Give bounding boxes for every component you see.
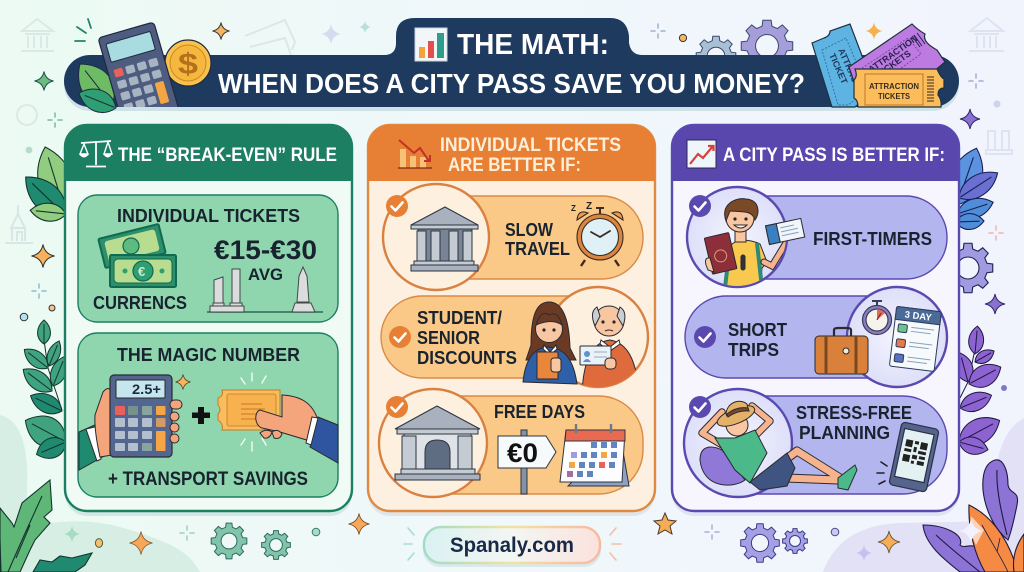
foliage: bottom left big leaves: [0, 480, 92, 572]
row label line 2: SENIOR: [417, 328, 480, 348]
panel: individual tickets are better if: [368, 125, 655, 516]
check badge: [694, 326, 716, 348]
icon: zero price sign: [498, 430, 556, 494]
icon: zero price sign: €0: [507, 438, 538, 468]
icon: alarm clock: Z: [571, 204, 576, 213]
badge pill: [424, 527, 600, 563]
title banner: [64, 18, 959, 111]
icon: museum: [395, 406, 480, 480]
logo badge: Spanaly.com: [423, 527, 601, 567]
icon: 3 day planner: 3 DAY: [904, 309, 933, 324]
ghost icon: church: [5, 205, 33, 243]
row: free days: [379, 389, 643, 497]
card: individual tickets: [78, 195, 338, 322]
panel header band: [66, 126, 351, 181]
illustration: calculator, coin and leaves: $: [178, 48, 198, 81]
row label line 2: TRAVEL: [505, 239, 570, 259]
row label line 1: STUDENT/: [417, 308, 502, 328]
card heading: THE MAGIC NUMBER: [117, 345, 300, 365]
ghost icon: ruined pillars right: [986, 131, 1012, 154]
icon: hand holding ticket: [218, 373, 338, 463]
panel heading: INDIVIDUAL TICKETS: [440, 135, 621, 156]
plus sign: [192, 407, 210, 424]
foliage: lower right purple fern: [952, 325, 1006, 458]
row label line 3: DISCOUNTS: [417, 348, 517, 368]
panel shadow: [368, 130, 655, 516]
icon: traveler with passport and ticket: [704, 199, 805, 290]
price range: €15-€30: [214, 235, 317, 265]
banner shadow: [64, 59, 959, 111]
row label: FREE DAYS: [494, 402, 585, 422]
icon: phone signal marks: [877, 462, 887, 484]
icon: student figure: [523, 302, 577, 384]
icon: rising chart: [687, 140, 716, 168]
foliage: bottom right purple and orange leaves: [923, 460, 1024, 572]
yellow ticket: [854, 69, 944, 107]
gears bottom left: [211, 523, 290, 559]
icon: senior figure: [582, 306, 636, 387]
icon: temple: [411, 207, 478, 271]
foliage: lower left fern: [18, 320, 73, 464]
label: average: AVG: [248, 265, 283, 284]
panel body: [672, 125, 959, 511]
blue ticket: ATTRACTION: [836, 47, 869, 104]
label: transport savings: + TRANSPORT SAVINGS: [108, 469, 308, 490]
icon: calendar: [560, 424, 629, 486]
illustration: ray marks near calculator: [75, 19, 91, 41]
icon: 3 day planner: [889, 306, 941, 371]
icon: falling chart: [398, 140, 432, 168]
panel header band: [368, 125, 655, 181]
row label line 2: PLANNING: [799, 423, 890, 443]
icon: banknotes: €: [138, 264, 145, 279]
check badge: [689, 195, 711, 217]
icon: ID card: [580, 346, 616, 369]
row: short trips: [685, 287, 947, 387]
panel body: [368, 125, 655, 511]
icon: balance scale: [79, 141, 112, 166]
icon: relaxing man: [700, 401, 857, 490]
ghost icon: temple right: [969, 18, 1004, 51]
ghost icons top left: temple, card and coin: [17, 19, 295, 125]
blue ticket: [812, 24, 875, 107]
gears bottom right: [741, 524, 807, 562]
title banner gears behind: [696, 20, 794, 55]
illustration: attraction tickets: [812, 24, 945, 107]
panel heading: A CITY PASS IS BETTER IF:: [723, 144, 945, 166]
check badge: [689, 396, 711, 418]
card: the magic number: [78, 333, 338, 497]
check badge: [386, 195, 408, 217]
row: stress-free planning: [684, 389, 947, 497]
panel heading line 2: ARE BETTER IF:: [448, 155, 581, 176]
panel shadow: [65, 130, 352, 516]
purple ticket: TICKETS: [875, 48, 913, 79]
panel header band: [673, 126, 958, 181]
purple ticket: [849, 24, 945, 100]
panel heading: THE “BREAK-EVEN” RULE: [118, 144, 337, 166]
title line 2: WHEN DOES A CITY PASS SAVE YOU MONEY?: [218, 68, 805, 99]
icon: banknotes: [98, 224, 176, 287]
icon: stopwatch: [862, 301, 892, 334]
foliage: upper right blue leaves and gear: [942, 143, 1003, 293]
yellow ticket: TICKETS: [878, 91, 910, 101]
background blob: lavender corner: [823, 418, 1024, 572]
icon: sparkle near calculator: [176, 374, 190, 390]
background blob: mint corner: [0, 415, 200, 572]
yellow ticket: ATTRACTION: [869, 81, 919, 91]
panel body: [65, 125, 352, 511]
badge shadow: [423, 531, 601, 567]
icon: phone with QR code: [889, 422, 939, 492]
icon: suitcase: [815, 328, 868, 374]
card heading: INDIVIDUAL TICKETS: [117, 206, 300, 226]
badge rays: [404, 528, 621, 560]
icon: hand holding calculator: 2.5+: [132, 382, 161, 397]
check badge: [389, 326, 411, 348]
row label line 1: STRESS-FREE: [796, 403, 912, 423]
row label line 1: SLOW: [505, 220, 553, 240]
purple ticket: ATTRACTION: [866, 33, 920, 75]
row: slow travel: [383, 184, 643, 290]
row label: FIRST-TIMERS: [813, 229, 932, 249]
icon: monument silhouettes: [207, 267, 323, 312]
badge text: Spanaly.com: [450, 534, 574, 557]
foliage: upper left green leaves: [16, 142, 81, 226]
row label line 1: SHORT: [728, 320, 787, 340]
title line 1: THE MATH:: [457, 29, 609, 61]
row: student and senior discounts: [381, 287, 648, 395]
icon: hand holding calculator: [79, 375, 182, 470]
title icon: bar chart: [415, 28, 447, 61]
row: first-timers: [687, 187, 947, 290]
label: currency: CURRENCS: [93, 293, 187, 313]
check badge: [386, 396, 408, 418]
illustration: calculator, coin and leaves: [78, 22, 212, 114]
banner shape: [64, 18, 959, 107]
icon: alarm clock: Z: [586, 201, 592, 212]
panel shadow: [672, 130, 959, 516]
panel: the break-even rule: [65, 125, 352, 516]
row label line 2: TRIPS: [728, 340, 779, 360]
icon: alarm clock: [571, 201, 623, 266]
blue ticket: TICKET: [827, 52, 850, 86]
panel: a city pass is better if: [672, 125, 959, 516]
